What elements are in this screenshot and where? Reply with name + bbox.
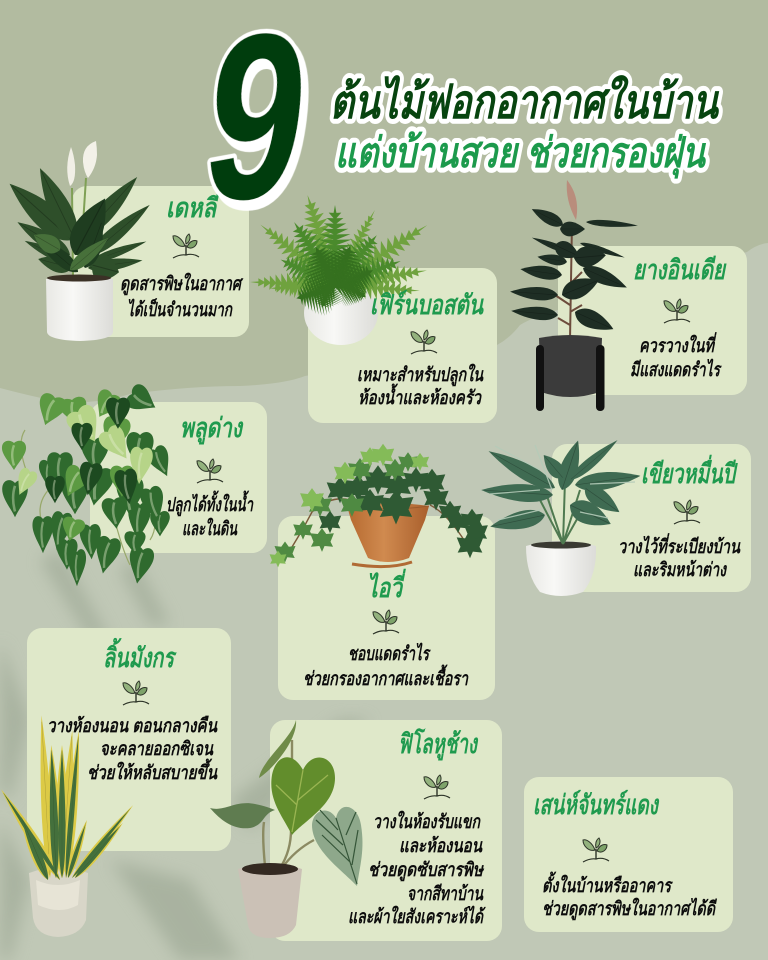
panel: aglaonema xyxy=(481,436,751,596)
panel: snake plant xyxy=(0,628,231,937)
description: philodendron: วางในห้องรับแขก xyxy=(373,810,481,833)
heading: pothos: พลูด่าง xyxy=(180,413,244,445)
description: snake plant: จะคลายออกซิเจน xyxy=(100,739,214,760)
description: peace lily xyxy=(120,272,244,321)
panel: ivy xyxy=(270,444,495,700)
description: rubber plant xyxy=(630,332,722,381)
description: peace lily: ดูดสารพิษในอากาศ xyxy=(120,272,244,296)
icon: sprout xyxy=(583,838,609,862)
description: aglaonema xyxy=(618,533,741,581)
icon: sprout xyxy=(674,500,700,524)
heading: aglaonema: เขียวหมื่นปี xyxy=(641,454,739,489)
heading: ivy: ไอวี่ xyxy=(367,568,407,603)
plant: ivy xyxy=(270,444,488,567)
plant: peace lily xyxy=(1,141,154,341)
description: peace lily: ได้เป็นจำนวนมาก xyxy=(127,298,233,321)
icon: sprout xyxy=(664,299,690,323)
title block xyxy=(192,0,719,249)
panel: philodendron xyxy=(210,720,502,941)
heading: boston fern: เฟิร์นบอสตัน xyxy=(370,289,484,320)
description: aglaonema: และริมหน้าต่าง xyxy=(633,559,727,581)
icon: sprout xyxy=(123,681,149,705)
heading: philodendron: ฟิโลหูช้าง xyxy=(398,727,479,761)
description: snake plant: วางห้องนอน ตอนกลางคืน xyxy=(47,715,218,737)
description: rubber plant: มีแสงแดดรำไร xyxy=(630,358,722,381)
heading: red sansevieria: เสน่ห์จันทร์แดง xyxy=(533,789,660,820)
description: ivy xyxy=(303,642,469,690)
plant: rubber plant xyxy=(510,180,638,411)
description: snake plant xyxy=(47,715,218,784)
panel: red sansevieria xyxy=(524,777,733,932)
description: rubber plant: ควรวางในที่ xyxy=(639,332,717,357)
plant: boston fern xyxy=(250,190,435,345)
panel: boston fern xyxy=(250,190,497,423)
icon: sprout xyxy=(173,234,199,258)
description: philodendron: จากสีทาบ้าน xyxy=(407,883,484,905)
icon: sprout xyxy=(197,459,223,483)
description: snake plant: ช่วยให้หลับสบายขึ้น xyxy=(87,758,218,784)
plant: pothos xyxy=(2,382,177,586)
plant: snake plant xyxy=(0,715,136,937)
icon: sprout xyxy=(424,775,450,799)
description: red sansevieria: ช่วยดูดสารพิษในอากาศได้ดี xyxy=(542,897,717,921)
heading: snake plant: ลิ้นมังกร xyxy=(103,637,177,673)
description: philodendron: และห้องนอน xyxy=(399,835,483,857)
description: boston fern: เหมาะสำหรับปลูกใน xyxy=(357,363,484,387)
description: philodendron xyxy=(348,810,486,928)
description: red sansevieria: ตั้งในบ้านหรืออาคาร xyxy=(542,871,673,897)
description: boston fern: ห้องน้ำและห้องครัว xyxy=(358,383,482,409)
panel: peace lily xyxy=(1,141,249,341)
description: ivy: ช่วยกรองอากาศและเชื้อรา xyxy=(303,664,469,690)
description: philodendron: และผ้าใยสังเคราะห์ได้ xyxy=(348,905,486,928)
description: pothos: และในดิน xyxy=(182,517,238,540)
description: boston fern xyxy=(357,363,484,409)
description: red sansevieria xyxy=(542,871,717,921)
panel: rubber plant xyxy=(510,180,747,411)
description: ivy: ชอบแดดรำไร xyxy=(348,642,431,665)
icon: sprout xyxy=(411,330,437,354)
description: pothos xyxy=(166,490,254,540)
description: philodendron: ช่วยดูดซับสารพิษ xyxy=(368,860,485,882)
description: pothos: ปลูกได้ทั้งในน้ำ xyxy=(166,490,254,517)
plant: philodendron xyxy=(210,720,362,938)
heading: peace lily: เดหลี xyxy=(166,193,219,223)
panel: pothos xyxy=(2,382,267,586)
icon: sprout xyxy=(373,610,399,634)
plant: aglaonema xyxy=(481,436,642,596)
heading: rubber plant: ยางอินเดีย xyxy=(633,255,727,285)
